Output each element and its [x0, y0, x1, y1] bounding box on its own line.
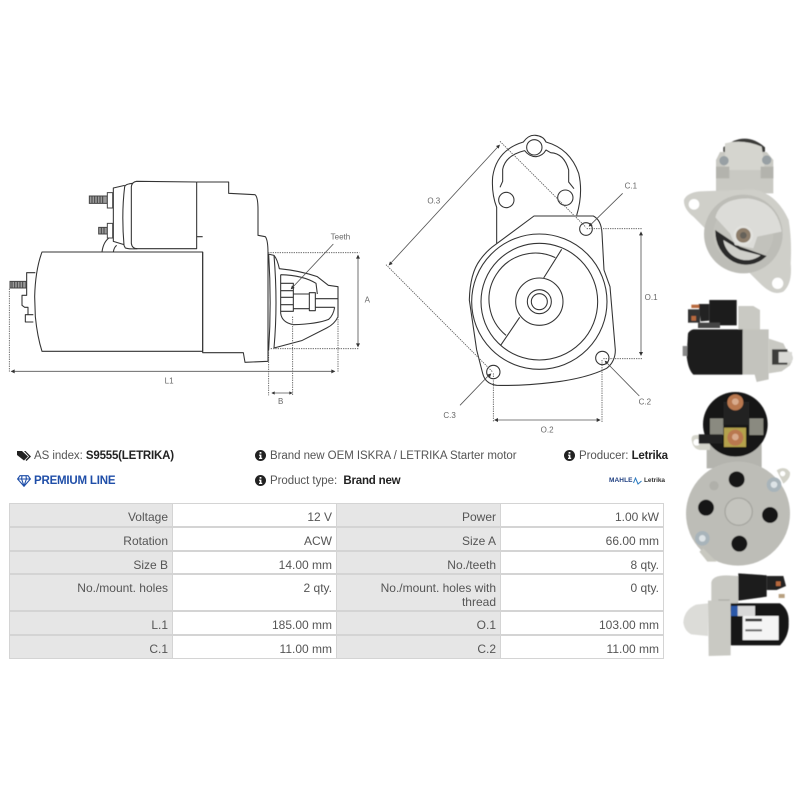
diagram: front view of mounting flange with dimensions [386, 134, 658, 435]
specifications table [9, 503, 664, 659]
dimension labels [165, 232, 371, 406]
specifications table: 0 qty. [631, 581, 659, 595]
drive end nose [268, 254, 338, 350]
specifications table: 11.00 mm [280, 642, 332, 656]
specifications table: 2 qty. [304, 581, 332, 595]
row: Size B / No./teeth [10, 552, 172, 573]
dimension labels: C.1 [625, 182, 638, 191]
logo: Mahle Letrika: Letrika [644, 477, 665, 484]
specifications table: No./teeth [447, 558, 496, 572]
dimension labels: L1 [165, 376, 174, 385]
info line: product type: Product type: Brand new [270, 475, 400, 487]
row: mounting holes: No./mount. holes [77, 581, 168, 595]
info line: AS index: AS index: S9555(LETRIKA) [34, 450, 174, 462]
row: L.1 / O.1: L.1 [151, 618, 168, 632]
info line: description: Brand new OEM ISKRA / LETRIKA Starter motor [270, 450, 516, 462]
dimension arrowheads [11, 255, 360, 395]
row: Size B / No./teeth: Size B [133, 558, 168, 572]
row: L.1 / O.1 [10, 612, 172, 634]
dimension labels: C.2 [639, 398, 652, 407]
logo: Mahle Letrika: MAHLE [609, 477, 633, 484]
icon: info [564, 450, 575, 461]
diagram: side view of starter motor with dimensions [8, 180, 371, 406]
solenoid body [131, 181, 197, 249]
specifications table: Power [462, 510, 496, 524]
icon: info [255, 475, 266, 486]
icon: wave [633, 477, 642, 485]
specifications table: 14.00 mm [279, 558, 332, 572]
dimension lines [9, 253, 359, 395]
dimension labels [427, 182, 658, 435]
premium line badge: PREMIUM LINE [34, 475, 115, 487]
specifications table: 103.00 mm [599, 618, 659, 632]
rear stud threads [10, 193, 113, 288]
photo: starter motor front flange [684, 138, 792, 294]
row: Rotation / Size A [10, 528, 172, 550]
dimension labels: A [365, 296, 371, 305]
pinion and shaft [281, 283, 338, 311]
specifications table: C.2 [477, 642, 496, 656]
icon: diamond [17, 475, 31, 487]
specifications table: O.1 [477, 618, 496, 632]
drive housing outline [197, 182, 268, 362]
solenoid link [102, 237, 117, 252]
top housing outline [492, 135, 581, 243]
row: C.1 / C.2: C.1 [149, 642, 168, 656]
dimension labels: Teeth [331, 232, 350, 241]
dimension labels: O.3 [427, 196, 441, 205]
drive cavity [281, 275, 335, 325]
motor body outline [35, 252, 203, 351]
specifications table: Size A [462, 534, 496, 548]
info line: producer: Producer: Letrika [579, 450, 668, 462]
icon: info [255, 450, 266, 461]
logo: Mahle Letrika [609, 477, 666, 485]
specifications table: 185.00 mm [272, 618, 332, 632]
dimension labels: C.3 [443, 411, 456, 420]
specifications table: 66.00 mm [606, 534, 659, 548]
solenoid cap [113, 183, 137, 249]
photo: starter motor side view with label [683, 572, 790, 656]
specifications table: No./mount. holes with [381, 581, 496, 595]
row: C.1 / C.2 [10, 636, 172, 658]
dimension labels: B [278, 397, 283, 406]
photo: starter motor side view, black housing [682, 299, 794, 382]
row: Rotation / Size A: Rotation [123, 534, 168, 548]
specifications table: ACW [304, 534, 332, 548]
specifications table: 12 V [307, 510, 332, 524]
mounting flange outline [469, 216, 615, 385]
dimension labels: O.2 [541, 426, 554, 435]
dimension lines [386, 141, 643, 422]
specifications table: thread [462, 595, 496, 609]
photo: starter motor rear view with solenoid [686, 391, 790, 566]
dimension labels: O.1 [645, 293, 658, 302]
rear terminal block [22, 273, 35, 322]
row: Voltage / Power: Voltage [128, 510, 168, 524]
concentric rings [472, 234, 607, 369]
specifications table: 8 qty. [631, 558, 659, 572]
row: Voltage / Power [10, 504, 172, 526]
specifications table: 1.00 kW [615, 510, 659, 524]
row: mounting holes [10, 575, 172, 610]
icon: tags [17, 451, 31, 461]
specifications table: 11.00 mm [607, 642, 659, 656]
dimension arrowheads [389, 145, 643, 422]
